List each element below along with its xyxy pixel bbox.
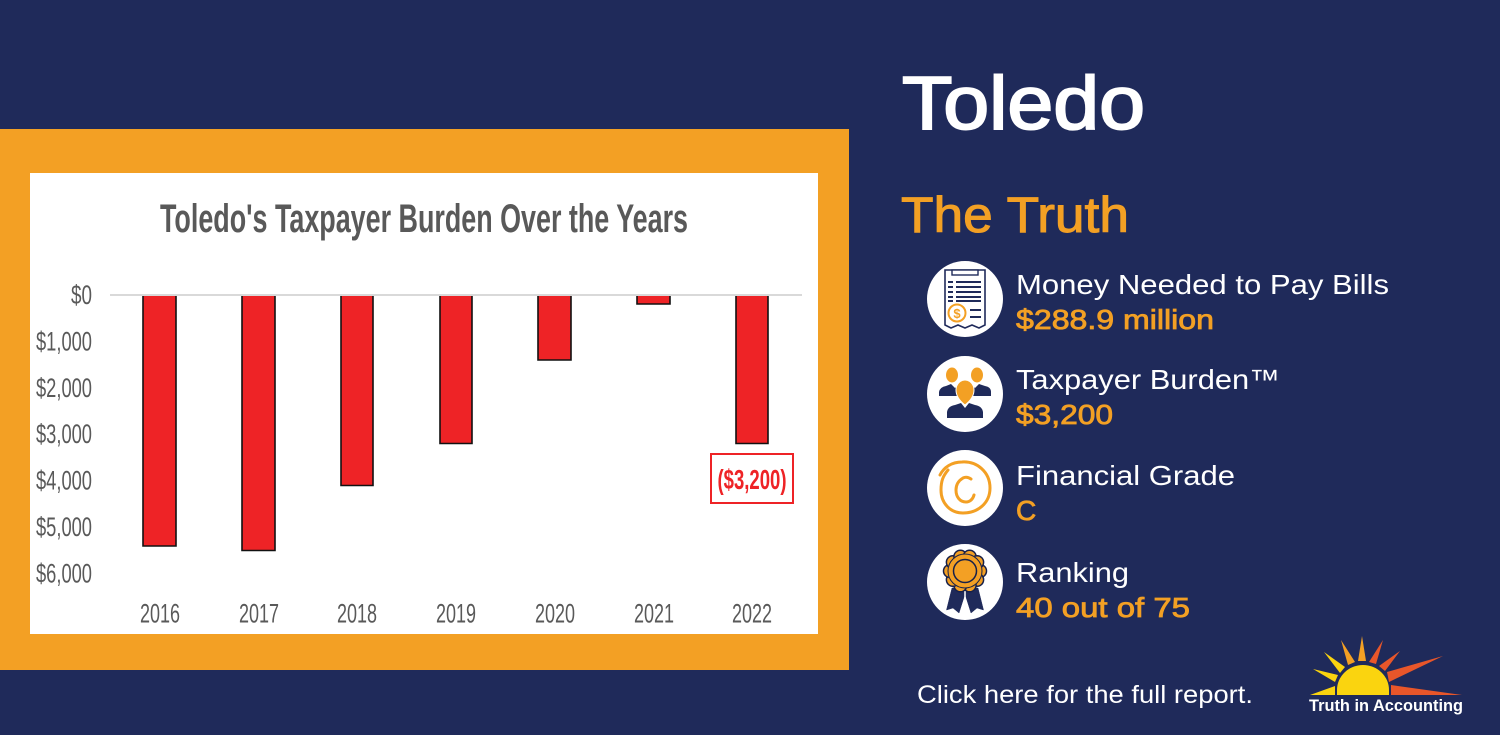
icon: bill receipt: $ <box>953 306 961 321</box>
icon: grade C <box>927 450 1003 526</box>
title: Toledo <box>902 61 1145 145</box>
bar chart: taxpayer burden by year: 2016 <box>140 598 180 628</box>
bar chart: taxpayer burden by year: $0 <box>71 280 92 310</box>
callout: 2022 value <box>711 454 793 503</box>
stat: ranking <box>1016 557 1190 623</box>
bar chart: taxpayer burden by year <box>36 280 802 628</box>
logo: Truth in Accounting <box>1309 636 1463 715</box>
bar chart: taxpayer burden by year: 2018 <box>337 598 377 628</box>
stat: taxpayer burden <box>1016 364 1280 430</box>
stat: financial grade <box>1016 460 1235 526</box>
bar chart: taxpayer burden by year: $5,000 <box>36 512 92 542</box>
stat: ranking: Ranking <box>1016 557 1129 588</box>
stat: money needed to pay bills: $288.9 million <box>1016 304 1214 335</box>
bar chart: taxpayer burden by year: 2021 <box>634 598 674 628</box>
stat: money needed to pay bills <box>1016 269 1389 335</box>
heading: The Truth: The Truth <box>901 187 1129 243</box>
stat: money needed to pay bills: Money Needed to Pay Bills <box>1016 269 1389 300</box>
bar chart: taxpayer burden by year: 2022 <box>732 598 772 628</box>
bar chart: taxpayer burden by year: $6,000 <box>36 558 92 588</box>
stat: ranking: 40 out of 75 <box>1016 592 1190 623</box>
bar chart: taxpayer burden by year: $4,000 <box>36 466 92 496</box>
icon: taxpayers <box>927 356 1003 432</box>
stat: financial grade: Financial Grade <box>1016 460 1235 491</box>
stat: taxpayer burden: $3,200 <box>1016 399 1113 430</box>
stat: financial grade: C <box>1016 495 1036 526</box>
bar chart: taxpayer burden by year: 2020 <box>535 598 575 628</box>
link: full report: Click here for the full report. <box>917 681 1253 709</box>
bar chart: taxpayer burden by year: $3,000 <box>36 419 92 449</box>
callout: 2022 value: ($3,200) <box>718 464 786 495</box>
bar chart: taxpayer burden by year: 2019 <box>436 598 476 628</box>
stat: taxpayer burden: Taxpayer Burden™ <box>1016 364 1280 395</box>
bar chart: taxpayer burden by year: 2017 <box>239 598 279 628</box>
icon: bill receipt <box>927 261 1003 337</box>
bar chart: taxpayer burden by year: $1,000 <box>36 326 92 356</box>
chart title: Toledo's Taxpayer Burden Over the Years <box>160 197 688 241</box>
logo: Truth in Accounting: Truth in Accounting <box>1309 696 1463 715</box>
panel: orange chart frame <box>0 129 849 670</box>
bar chart: taxpayer burden by year: $2,000 <box>36 373 92 403</box>
icon: ranking ribbon <box>927 544 1003 620</box>
